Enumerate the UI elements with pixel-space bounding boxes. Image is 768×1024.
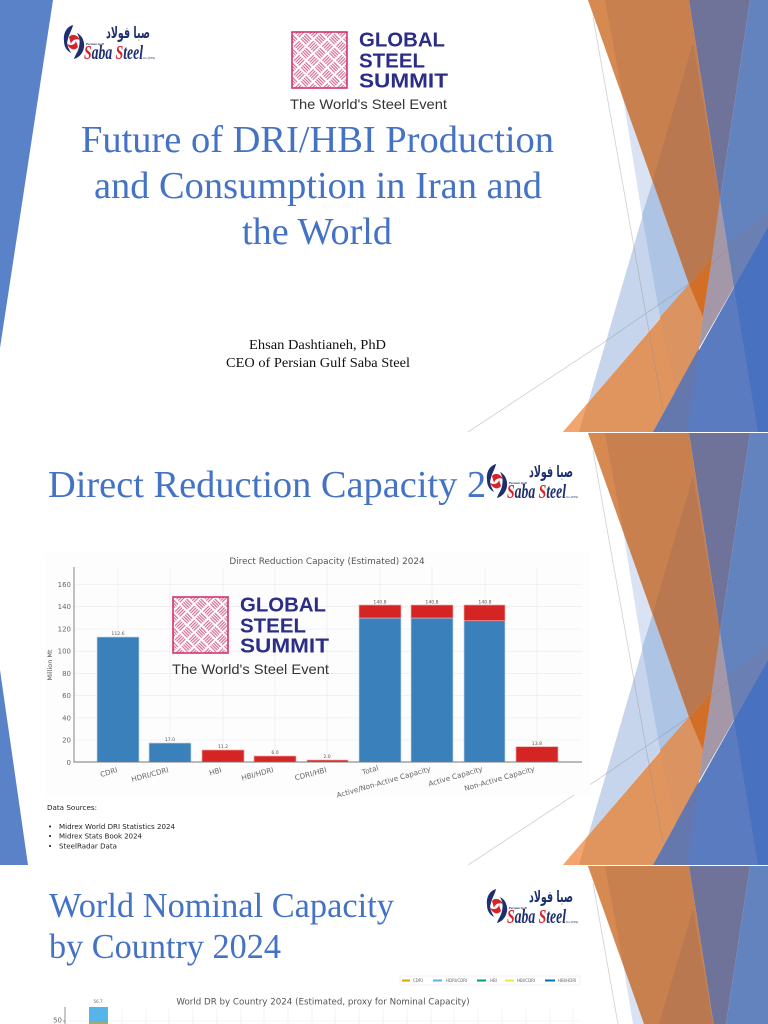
logo: Saba Steel: Persian Gulf	[509, 481, 527, 485]
y axis tick labels: 160	[58, 581, 71, 589]
data sources: Data Sources:	[47, 804, 97, 812]
value labels: 13.8	[532, 741, 542, 747]
legend	[400, 976, 580, 985]
data sources: •	[48, 842, 52, 850]
value labels: 2.0	[323, 754, 331, 760]
logo: Saba Steel: Saba Steel	[84, 42, 143, 64]
title: World Nominal Capacity	[49, 886, 394, 925]
value labels: 11.2	[218, 744, 228, 750]
title: and Consumption in Iran and	[94, 165, 542, 207]
slide 2: direct reduction capacity	[0, 433, 768, 865]
title: the World	[242, 211, 392, 253]
logo: Global Steel Summit overlay: STEEL	[240, 616, 306, 638]
category labels: Active Capacity	[427, 764, 484, 788]
title: by Country 2024	[49, 927, 281, 966]
logo: Global Steel Summit	[290, 30, 448, 112]
data sources: Midrex Stats Book 2024	[59, 832, 143, 840]
left blue wedge	[0, 0, 53, 348]
category labels: HBI	[208, 765, 223, 778]
background decoration: right geometric shapes	[588, 866, 768, 1024]
legend: HBI	[490, 978, 497, 983]
logo: Global Steel Summit: SUMMIT	[359, 71, 448, 93]
y axis tick labels: 40	[62, 714, 71, 722]
logo: Global Steel Summit overlay	[172, 594, 329, 677]
logo: Global Steel Summit overlay: SUMMIT	[240, 636, 329, 658]
logo: Global Steel Summit: STEEL	[359, 50, 425, 72]
value labels: 17.0	[165, 737, 175, 743]
y axis tick labels: 120	[58, 626, 71, 634]
axis	[63, 1007, 65, 1024]
logo: Saba Steel: صبا فولاد	[106, 23, 150, 42]
y axis tick labels: 60	[62, 692, 71, 700]
logo: Global Steel Summit overlay: GLOBAL	[240, 594, 326, 616]
stacked bar	[89, 1007, 108, 1022]
category labels: CDRI	[99, 765, 119, 779]
data sources: •	[48, 832, 52, 840]
slide 3: world nominal capacity	[49, 866, 768, 1024]
y axis title: Million Mt	[46, 649, 54, 681]
category labels: HDRI/CDRI	[130, 765, 170, 784]
background decoration: right geometric shapes	[468, 433, 768, 865]
y axis tick labels: 100	[58, 648, 71, 656]
data sources: •	[48, 823, 52, 831]
left blue wedge	[0, 670, 28, 865]
value labels: 112.6	[111, 631, 125, 637]
category labels: HBI/HDRI	[240, 765, 275, 782]
author: Ehsan Dashtianeh, PhD	[249, 338, 386, 353]
logo: Saba Steel	[487, 456, 581, 504]
category labels: Non-Active Capacity	[463, 764, 536, 793]
chart: world DR by country	[53, 998, 582, 1024]
logo: Saba Steel	[487, 887, 578, 928]
category labels	[99, 763, 536, 800]
data sources: Midrex World DRI Statistics 2024	[59, 823, 176, 831]
logo: Saba Steel: Persian Gulf	[86, 42, 104, 46]
value labels: 6.0	[271, 750, 279, 756]
y axis tick labels: 0	[67, 759, 71, 767]
logo: Saba Steel	[64, 23, 155, 64]
data sources: SteelRadar Data	[59, 842, 117, 850]
logo: Saba Steel: Co.(PJS)	[143, 56, 155, 60]
bar chart: direct reduction capacity	[45, 553, 590, 800]
title: Future of DRI/HBI Production	[81, 119, 554, 161]
category labels: Total	[360, 763, 380, 777]
slide 1: title slide	[0, 0, 768, 432]
value labels: 140.8	[373, 600, 387, 606]
value labels: 140.8	[425, 600, 439, 606]
logo: Saba Steel: Co.(PJS)	[566, 920, 578, 924]
value labels	[111, 600, 542, 760]
y axis tick labels: 20	[62, 737, 71, 745]
logo: Saba Steel: صبا فولاد	[529, 462, 573, 481]
logo: Global Steel Summit: The World's Steel Event	[290, 96, 447, 112]
logo: Saba Steel: صبا فولاد	[529, 887, 573, 906]
y axis tick labels: 80	[62, 670, 71, 678]
data sources	[47, 804, 176, 850]
author: CEO of Persian Gulf Saba Steel	[226, 356, 410, 371]
title: Direct Reduction Capacity 2024	[48, 464, 544, 506]
logo: Global Steel Summit: GLOBAL	[359, 30, 445, 52]
legend: CDRI	[413, 978, 423, 983]
bars	[97, 605, 558, 762]
chart title: Direct Reduction Capacity (Estimated) 2024	[229, 557, 425, 567]
category labels: Active/Non-Active Capacity	[335, 764, 432, 800]
legend: HBI/HDRI	[558, 978, 576, 983]
logo: Global Steel Summit overlay: The World's Steel Event	[172, 661, 329, 677]
axes	[74, 567, 582, 762]
author	[226, 338, 410, 371]
y axis tick labels: 140	[58, 603, 71, 611]
bar value: 56.7	[94, 999, 103, 1004]
title	[49, 886, 394, 966]
category labels: CDRI/HBI	[294, 765, 328, 782]
logo: Saba Steel: Persian Gulf	[509, 906, 527, 910]
legend: HDRI/CDRI	[446, 978, 467, 983]
logo: Saba Steel: Co.(PJS)	[566, 495, 578, 499]
background decoration: right geometric shapes	[468, 0, 768, 432]
title	[81, 119, 554, 253]
value labels: 140.8	[478, 600, 492, 606]
chart title: World DR by Country 2024 (Estimated, proxy for Nominal Capacity)	[176, 998, 470, 1008]
legend: HBI/CDRI	[517, 978, 535, 983]
logo: Saba Steel: Saba Steel	[507, 481, 566, 503]
y axis tick labels	[58, 581, 71, 767]
logo: Saba Steel: Saba Steel	[507, 906, 566, 928]
